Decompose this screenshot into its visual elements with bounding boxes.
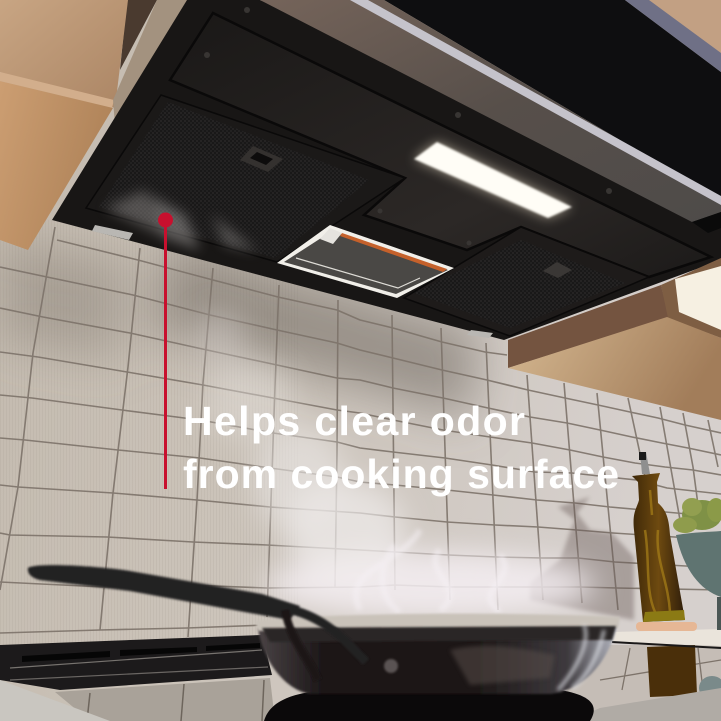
left mesh filter xyxy=(99,102,369,258)
left wall cabinets xyxy=(0,0,157,250)
steam wisps xyxy=(356,530,505,612)
bottle body xyxy=(632,473,685,622)
hood screws xyxy=(204,7,612,246)
frying pan xyxy=(28,565,620,721)
black glass front xyxy=(384,0,721,200)
pan handle xyxy=(28,565,366,680)
cooktop back vent xyxy=(0,635,272,690)
blue edge highlight xyxy=(625,0,721,72)
right filter frame xyxy=(404,227,649,336)
range hood xyxy=(52,0,721,340)
filter clip right xyxy=(467,330,493,338)
strip highlight xyxy=(350,0,721,205)
right mesh filter xyxy=(414,240,625,328)
upper panel xyxy=(170,13,711,277)
stainless front strip xyxy=(260,0,721,222)
callout leader line xyxy=(158,212,173,489)
teal bowl xyxy=(676,531,721,597)
pan rim xyxy=(255,614,620,631)
right reflection area xyxy=(560,645,721,721)
steam on filter xyxy=(105,190,258,252)
left filter frame xyxy=(86,95,405,262)
rivets xyxy=(384,659,398,673)
artichoke leaves xyxy=(673,498,721,533)
left counter surface xyxy=(0,680,110,721)
left filter handle xyxy=(240,146,283,172)
coaster xyxy=(636,622,697,631)
hood underside xyxy=(52,0,721,340)
bottle reflection xyxy=(647,645,697,697)
light glow xyxy=(414,142,572,218)
steam cloud xyxy=(194,310,595,619)
bright cabinet light panel xyxy=(675,266,721,330)
pan reflection xyxy=(264,690,594,721)
right upper cabinet xyxy=(508,258,721,420)
filter clip left xyxy=(92,225,133,240)
bottle streaks xyxy=(645,490,670,612)
pan highlight xyxy=(558,625,604,690)
bowl reflection xyxy=(699,676,721,692)
callout headline: from cooking surface xyxy=(183,451,619,497)
pan body xyxy=(258,622,618,694)
bowl stem xyxy=(717,597,721,630)
oil bottle xyxy=(632,452,697,631)
bottle shadow on tiles xyxy=(530,497,634,620)
counter slab xyxy=(612,629,721,646)
control display xyxy=(692,212,721,233)
callout headline xyxy=(183,398,619,497)
warning sticker xyxy=(277,225,454,298)
callout headline: Helps clear odor xyxy=(183,398,525,444)
right filter handle xyxy=(543,262,572,278)
right cabinet top corner xyxy=(649,0,721,53)
counter foreground xyxy=(590,688,721,721)
lower tiles below vent xyxy=(55,678,275,721)
plant in bowl xyxy=(673,498,721,630)
bottle cap xyxy=(640,452,650,474)
tiled backsplash xyxy=(0,205,721,694)
hood side trim xyxy=(113,0,190,125)
light bar xyxy=(414,142,572,218)
